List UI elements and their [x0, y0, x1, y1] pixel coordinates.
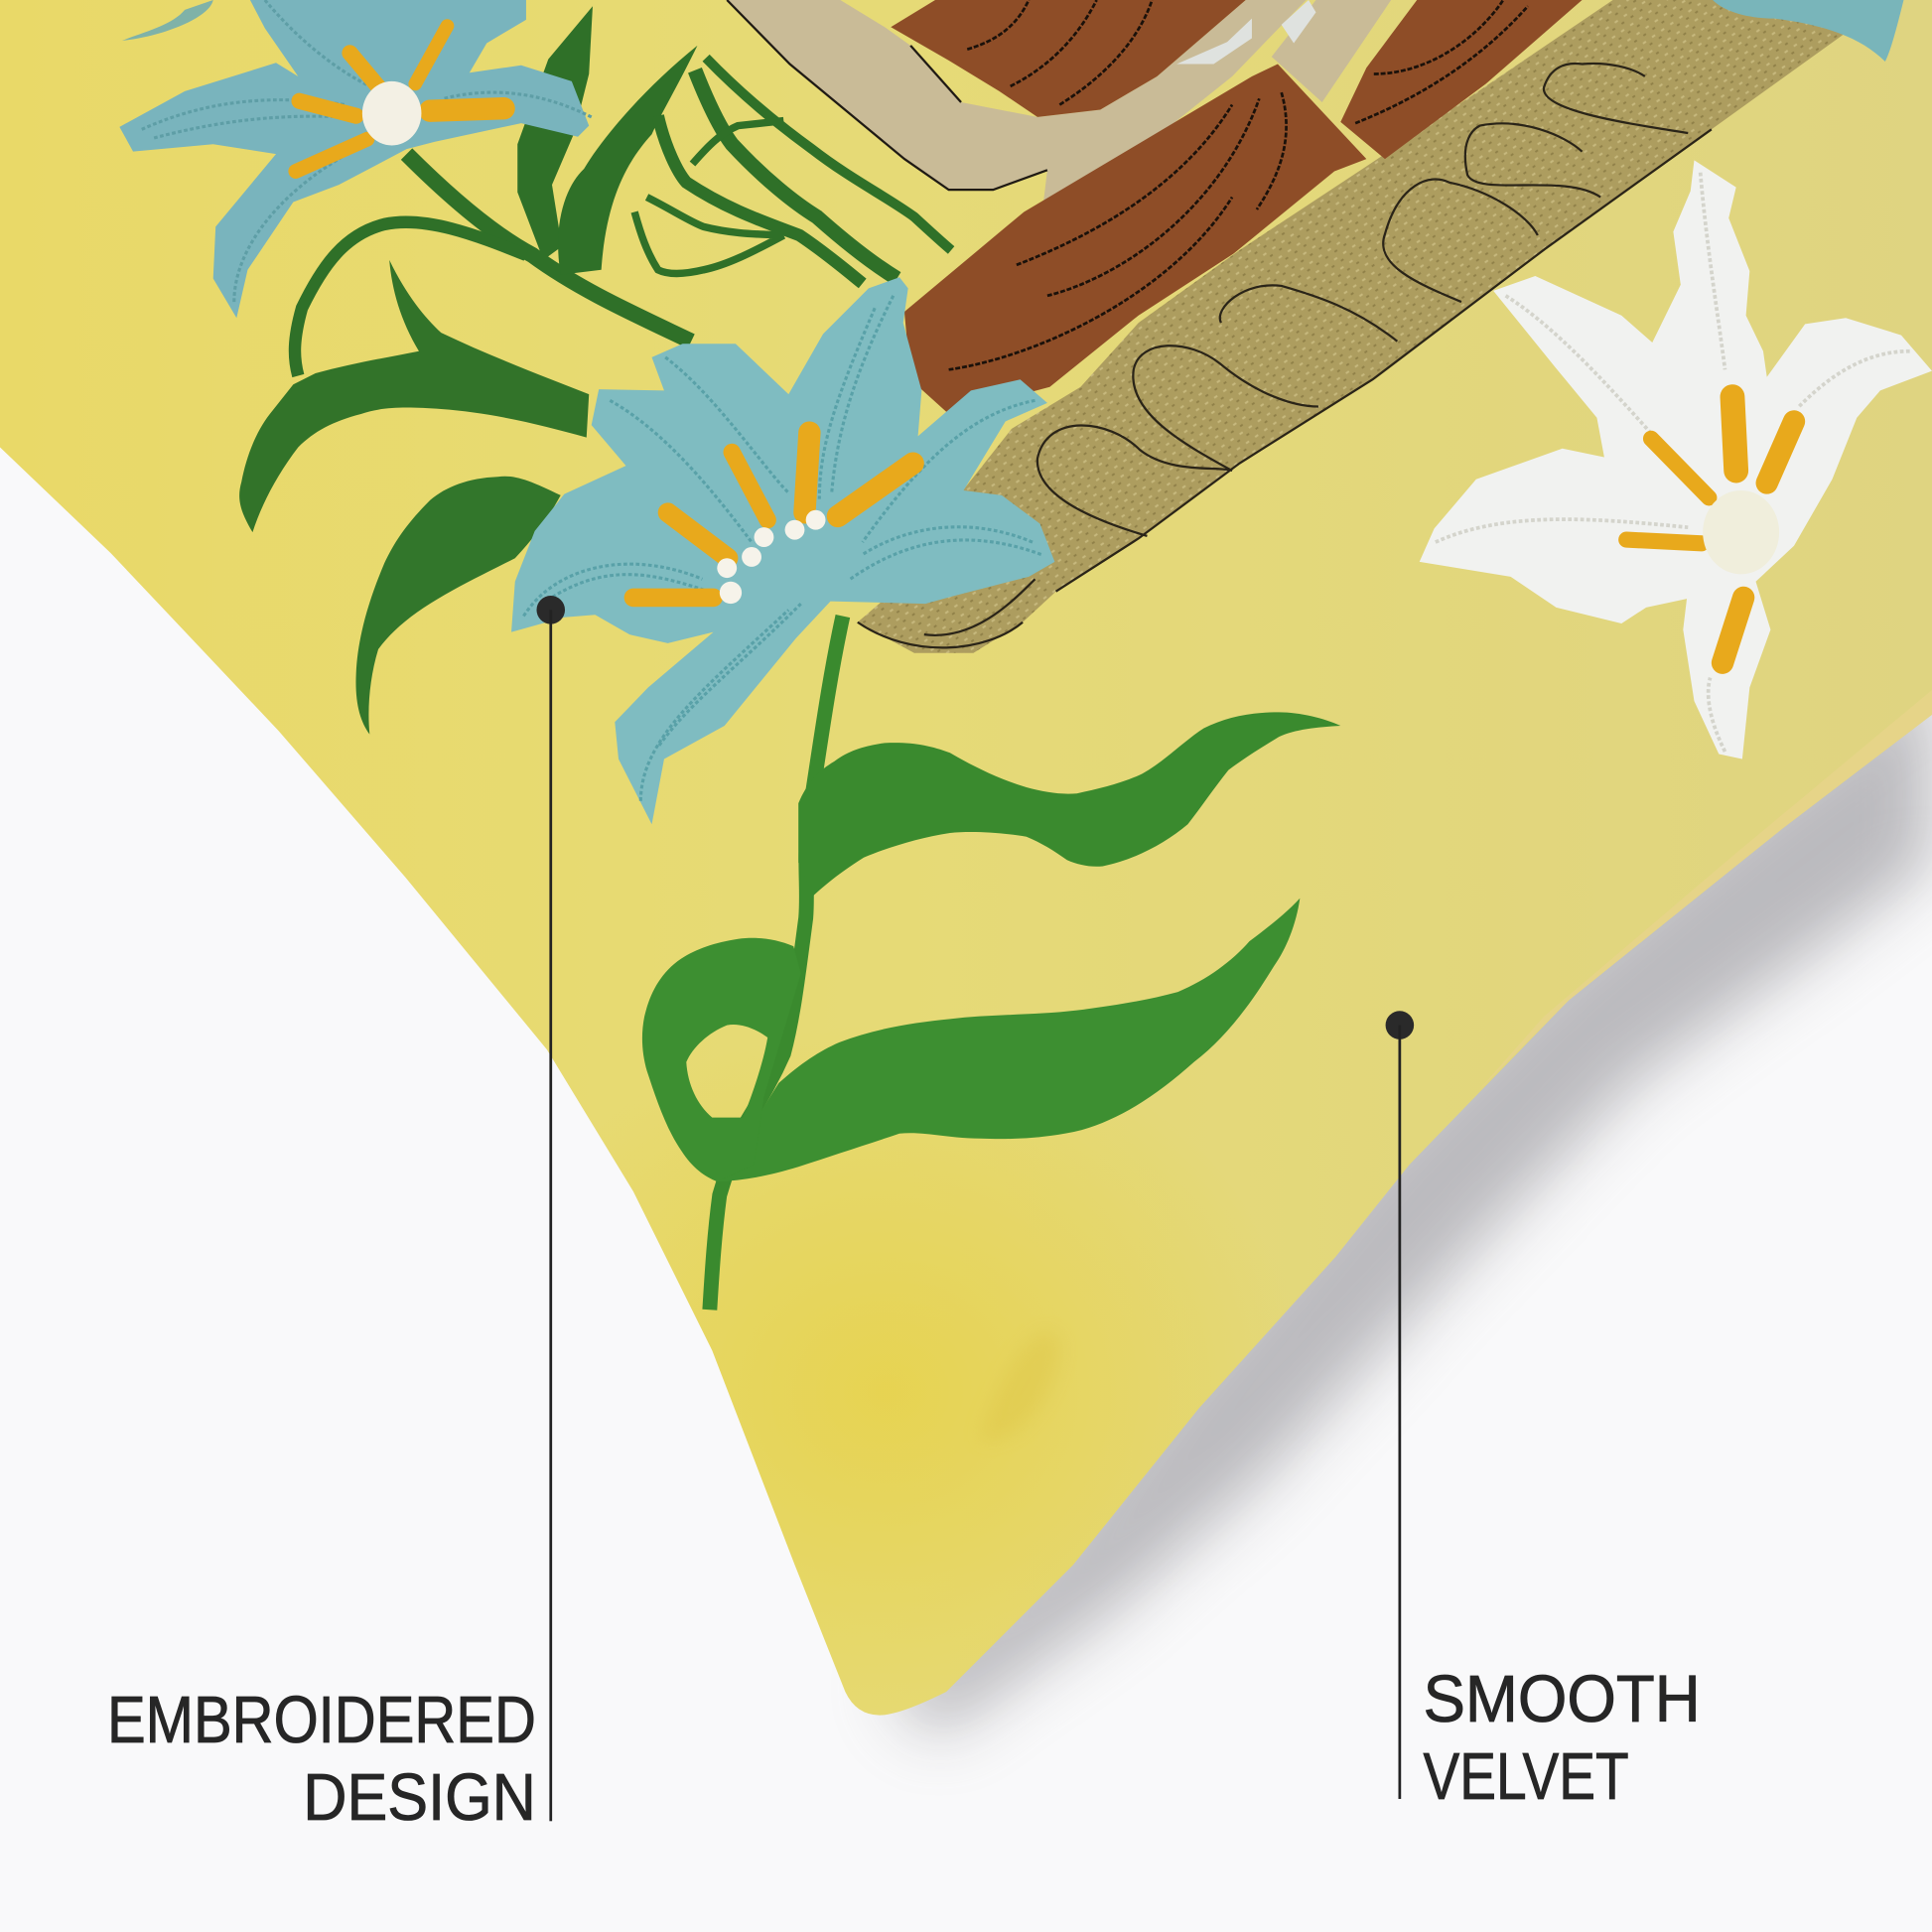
label: embroidered design: DESIGN — [303, 1760, 536, 1835]
flower: small teal lily top-left — [119, 0, 592, 318]
figure: tan arms and hands — [727, 0, 1391, 219]
icon: top-right teal flower fragment — [1713, 0, 1903, 62]
embroidered gold lotus base — [858, 0, 1891, 653]
flower: large teal lily centre — [511, 277, 1054, 824]
flower stems and leaves: lower group — [642, 617, 1340, 1310]
label: embroidered design: EMBROIDERED — [107, 1683, 536, 1757]
callout: smooth velvet — [1386, 1011, 1701, 1814]
callout: embroidered design — [107, 596, 565, 1835]
label: smooth velvet: SMOOTH — [1423, 1662, 1701, 1736]
label: smooth velvet: VELVET — [1423, 1739, 1629, 1814]
figure: brown robe — [891, 0, 1583, 414]
cushion shadow — [888, 665, 1932, 1737]
flower stems and leaves: upper group — [239, 6, 951, 735]
flower: white lily right — [1420, 160, 1932, 759]
icon: top-left teal sprig — [122, 0, 213, 41]
